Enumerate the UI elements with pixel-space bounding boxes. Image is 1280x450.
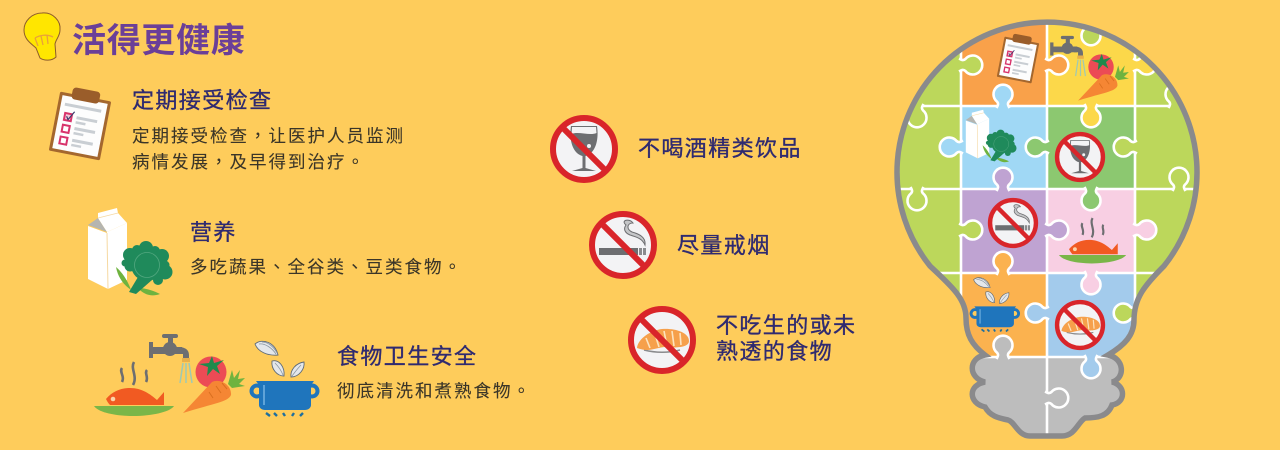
icon: milk carton and broccoli [88,208,172,295]
bulb icon: pot and clams [971,278,1019,332]
icon: pot and clams [252,341,318,416]
heading: nutrition: 营养 [190,220,237,245]
item: no smoking [592,214,771,276]
text: check-ups description: 病情发展，及早得到治疗。 [132,149,366,174]
heading: food hygiene: 食物卫生安全 [337,344,477,369]
icon: clipboard [49,85,113,160]
bulb icon: milk and broccoli [966,110,1016,162]
bulb outline [897,22,1197,436]
icon: tap, tomato and carrot [149,334,245,413]
text: check-ups description: 定期接受检查，让医护人员监测 [132,123,405,148]
heading: check-ups: 定期接受检查 [132,88,272,113]
text: check-ups description [132,123,405,174]
icon: no wine [553,118,615,180]
text: no smoking: 尽量戒烟 [677,233,771,258]
text: no raw food [716,313,856,364]
icon: title light bulb [24,13,60,60]
text: no alcohol: 不喝酒精类饮品 [638,136,802,161]
bulb icon: fish on a plate [1059,218,1126,263]
bulb icon: clipboard [997,32,1040,83]
text: food hygiene description: 彻底清洗和煮熟食物。 [337,378,532,403]
icon: no sushi [631,309,693,371]
item: no alcohol [553,118,802,180]
icon: fish on a plate [94,362,174,416]
item: no raw food [631,309,856,371]
text: nutrition description: 多吃蔬果、全谷类、豆类食物。 [190,254,463,279]
title: 活得更健康 [72,22,246,60]
text: no raw food: 熟透的食物 [716,339,833,364]
section: regular check-ups [49,85,405,174]
section: food hygiene [94,334,532,416]
puzzle pieces [900,24,1194,434]
puzzle light bulb [890,15,1205,442]
section: nutrition [88,208,463,295]
bulb icon: no wine [1057,134,1103,180]
bulb icon: tap, tomato and carrot [1050,36,1129,101]
text: no raw food: 不吃生的或未 [716,313,856,338]
bulb icon: no smoking [990,200,1036,246]
bulb icon: no raw food [1057,302,1103,348]
icon: no cigarette [592,214,654,276]
